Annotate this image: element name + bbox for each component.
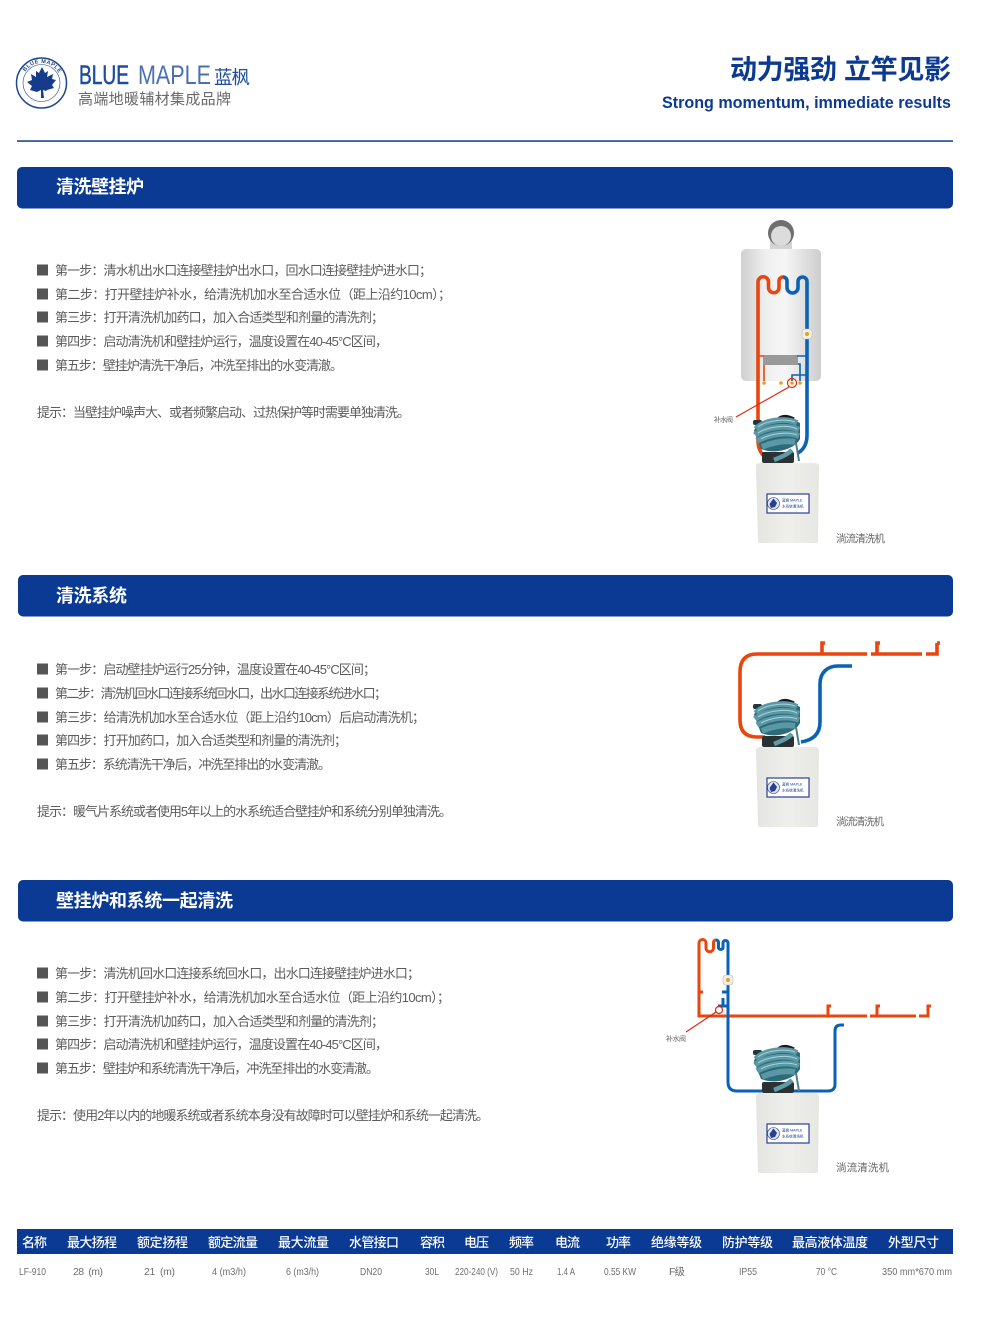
brand name [79,60,250,90]
table value row: 350 mm*670 mm [882,1266,952,1278]
tip: boiler: 提示：当壁挂炉噪声大、或者频繁启动、过热保护等时需要单独清洗。 [37,405,410,420]
table header row: 额定流量 [208,1235,258,1250]
table value row: IP55 [739,1266,757,1278]
cleaning machine: 水系统清洗机 [782,788,804,792]
step list: boiler: 第三步：打开清洗机加药口，加入合适类型和剂量的清洗剂； [55,310,384,326]
step list: boiler: 第二步：打开壁挂炉补水，给清洗机加水至合适水位（距上沿约10cm）； [55,287,451,303]
callout: make-up valve [666,1006,722,1043]
table header row: 额定扬程 [137,1235,188,1250]
table value row: 1.4 A [557,1266,575,1278]
header subtitle: Strong momentum, immediate results [662,94,951,112]
diagram: boiler with cleaning machine [714,220,886,545]
callout: make-up valve: 补水阀 [666,1034,686,1043]
machine caption: 淌流清洗机 [836,532,886,545]
cleaning machine [753,416,819,543]
panel: clean the system [18,575,953,828]
cleaning machine: 蓝枫 MAPLE [782,1128,803,1132]
table value row: 6 (m3/h) [286,1266,319,1278]
table value row: 220-240 (V) [455,1266,498,1278]
heading banner: system [18,575,953,616]
red supply pipe [699,940,931,1016]
panel: clean the boiler [17,167,953,545]
table header row: 电流 [555,1235,580,1250]
cleaning machine: 蓝枫 MAPLE [782,498,803,502]
gauge [802,329,812,339]
diagram: system pipework with cleaning machine [740,643,940,828]
step list: together: 第五步：壁挂炉和系统清洗干净后，冲洗至排出的水变清澈。 [55,1061,379,1076]
gauge [723,975,733,985]
step list: together: 第四步：启动清洗机和壁挂炉运行，温度设置在40-45°C区间， [55,1037,388,1052]
machine caption: 淌流清洗机 [836,1161,890,1174]
icon: flue [768,220,794,250]
table value row: 70 °C [816,1266,837,1278]
brand name: MAPLE [138,60,211,90]
step list: system: 第二步：清洗机回水口连接系统回水口，出水口连接系统进水口； [55,686,387,702]
table value row [19,1266,952,1278]
cleaning machine: 蓝枫 MAPLE [782,782,803,786]
cleaning machine: 水系统清洗机 [782,504,804,508]
brand name: BLUE [79,60,129,90]
table header row: 频率 [509,1235,534,1250]
table value row: 4 (m3/h) [212,1266,246,1278]
step list: together: 第二步：打开壁挂炉补水，给清洗机加水至合适水位（距上沿约10cm）； [55,990,450,1006]
table header row: 最大扬程 [67,1235,117,1250]
valves [762,381,802,385]
table header row: 最大流量 [278,1235,329,1250]
step list: system: 第一步：启动壁挂炉运行25分钟，温度设置在40-45°C区间； [55,662,376,678]
table value row: 30L [425,1266,439,1278]
boiler body [741,249,821,381]
heading banner: together: 壁挂炉和系统一起清洗 [56,890,233,911]
table header row: 水管接口 [349,1235,399,1250]
brand name: 蓝枫 [214,67,250,88]
step list: boiler: 第一步：清水机出水口连接壁挂炉出水口，回水口连接壁挂炉进水口； [55,263,432,279]
table header row: 外型尺寸 [888,1235,939,1250]
step list: together: 第一步：清洗机回水口连接系统回水口，出水口连接壁挂炉进水口； [55,966,420,982]
step list: boiler: 第五步：壁挂炉清洗干净后，冲洗至排出的水变清澈。 [55,358,343,373]
step list: system: 第四步：打开加药口，加入合适类型和剂量的清洗剂； [55,733,347,749]
table header row: 名称 [22,1235,47,1250]
step list: boiler [37,263,451,373]
red supply pipe [758,277,783,458]
panel: clean boiler and system together [18,880,953,1174]
blue return pipe [783,277,807,453]
diagram: combined pipework with cleaning machine [666,940,931,1174]
cleaning machine: 水系统清洗机 [782,1134,804,1138]
table value row: F 级 [669,1266,686,1278]
header: brand logo [16,57,250,109]
step list: together: 第三步：打开清洗机加药口，加入合适类型和剂量的清洗剂； [55,1014,384,1030]
cleaning machine [753,700,819,827]
brand slogan: 高端地暖辅材集成品牌 [78,91,231,108]
red supply pipe [740,643,940,737]
table header row: 容积 [420,1235,445,1250]
heading banner: boiler: 清洗壁挂炉 [56,176,144,197]
tip: together: 提示：使用2年以内的地暖系统或者系统本身没有故障时可以壁挂炉和系统一起清洗。 [37,1108,489,1123]
table value row: 28 (m) [73,1266,103,1278]
callout: make-up valve: 补水阀 [714,415,733,424]
table header row: 电压 [464,1235,489,1250]
table value row: DN20 [360,1266,382,1278]
table value row: 21 (m) [144,1266,175,1278]
specification table [17,1229,953,1278]
table header row: 防护等级 [722,1235,773,1250]
table header row [17,1229,953,1254]
step list: system: 第五步：系统清洗干净后，冲洗至排出的水变清澈。 [55,757,331,772]
blue return pipe [801,666,852,742]
table value row: LF-910 [19,1266,46,1278]
icon: maple leaf emblem: BLUE MAPLE [22,59,62,73]
machine caption: 淌流清洗机 [836,815,884,828]
step list: system: 第三步：给清洗机加水至合适水位（距上沿约10cm）后启动清洗机； [55,710,425,726]
table value row: 50 Hz [510,1266,533,1278]
cleaning machine [753,1046,819,1173]
table header row: 绝缘等级 [651,1235,702,1250]
tip: system: 提示：暖气片系统或者使用5年以上的水系统适合壁挂炉和系统分别单独清洗。 [37,804,452,819]
table header row: 最高液体温度 [792,1235,868,1250]
callout: make-up valve [714,378,796,424]
step list: system [37,662,425,772]
step list: together [37,966,450,1076]
table header row: 功率 [606,1235,631,1250]
step list: boiler: 第四步：启动清洗机和壁挂炉运行，温度设置在40-45°C区间， [55,334,388,349]
heat exchanger [763,355,798,365]
header title: 动力强劲 立竿见影 [730,55,951,85]
table value row: 0.55 KW [604,1266,636,1278]
heading banner: system: 清洗系统 [56,585,127,606]
heading banner: boiler [17,167,953,208]
icon: maple leaf emblem [16,57,68,109]
blue return pipe [716,940,844,1091]
heading banner: together [18,880,953,922]
